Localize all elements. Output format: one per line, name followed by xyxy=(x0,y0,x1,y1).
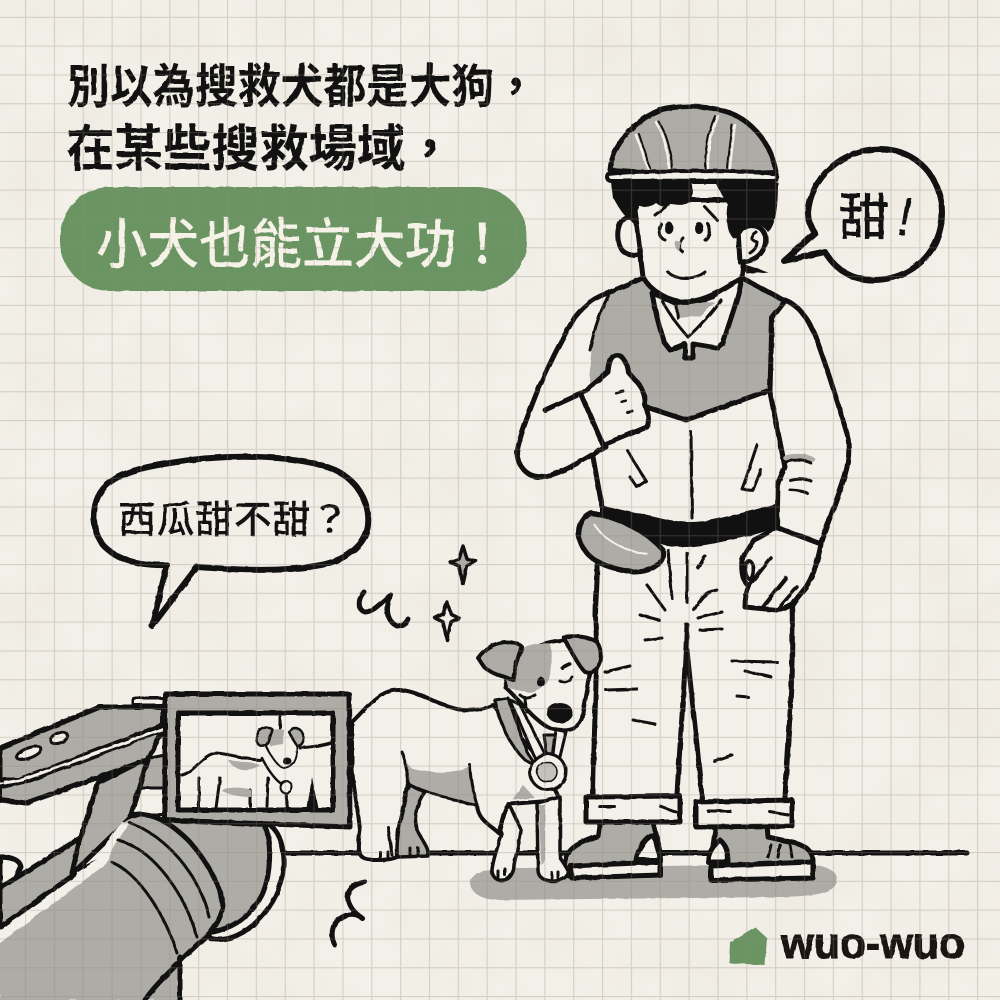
dog: far hind leg xyxy=(390,785,428,857)
man xyxy=(517,107,849,880)
man: pockets and zipper xyxy=(627,432,761,518)
man: right boot xyxy=(708,825,813,880)
man: pants xyxy=(592,540,793,800)
dog: medal xyxy=(530,754,566,790)
man: left arm xyxy=(517,292,612,477)
highlight pill with headline xyxy=(60,187,527,291)
man: waist pouch xyxy=(578,513,664,572)
camera: hinge pieces xyxy=(128,698,165,815)
man: arm sleeve line xyxy=(545,394,580,410)
speech bubble: 甜: ! xyxy=(897,187,912,247)
dog: medal ribbon xyxy=(495,698,566,765)
camera: flip screen xyxy=(165,694,350,827)
man: vest xyxy=(590,278,785,420)
man: right hand xyxy=(742,527,821,610)
man: torso edges xyxy=(593,392,785,525)
camera: lens outline xyxy=(0,814,223,1000)
dog: body xyxy=(352,690,560,860)
dog: near front leg xyxy=(498,785,568,881)
dog xyxy=(352,636,601,881)
logo: wordmark: wuo-wuo xyxy=(780,919,965,968)
man: trouser cuffs xyxy=(586,796,792,827)
man: collar xyxy=(652,278,742,358)
man: face xyxy=(618,200,768,302)
dog: paws on hind leg xyxy=(380,752,477,858)
man: hair xyxy=(611,182,778,238)
camera: side body xyxy=(0,838,103,927)
title line 1: 別以為搜救犬都是大狗， xyxy=(67,60,537,113)
camera xyxy=(0,694,350,1000)
dog: far front leg xyxy=(492,806,521,880)
sparkle: lower xyxy=(435,602,459,640)
dog: belly patch xyxy=(402,752,477,804)
man: thumbs-up hand xyxy=(581,355,648,445)
camera: top handle xyxy=(0,707,163,780)
camera: lens back xyxy=(165,820,270,932)
man: torso xyxy=(590,300,784,510)
speech bubble: 甜: 甜 xyxy=(839,190,889,246)
camera: lens rim xyxy=(180,825,284,940)
speech bubble: 甜 xyxy=(784,149,942,280)
camera: arm xyxy=(68,758,148,878)
man: left boot xyxy=(564,822,660,878)
man: right arm xyxy=(770,300,849,545)
man: vest bottom edge xyxy=(610,278,785,420)
camera: preview window xyxy=(178,713,333,810)
ground shadow xyxy=(470,864,837,900)
camera: small buttons xyxy=(15,730,69,762)
sparkle: upper xyxy=(450,546,476,584)
man: helmet xyxy=(607,107,777,181)
speech bubble: 西瓜甜不甜 xyxy=(94,457,368,626)
man: wrinkles xyxy=(786,456,813,494)
small motion mark xyxy=(332,882,365,945)
ground line xyxy=(285,850,967,856)
camera: white edge highlight xyxy=(0,822,130,943)
logo xyxy=(729,919,965,968)
highlight pill with headline: 小犬也能立大功！ xyxy=(96,215,508,275)
camera: handle highlight xyxy=(4,729,163,783)
squiggle mark xyxy=(359,592,408,626)
logo: house icon xyxy=(729,927,767,965)
camera: lens ribs xyxy=(112,823,209,953)
dog: head xyxy=(478,636,601,730)
speech bubble: 西瓜甜不甜: 西瓜甜不甜？ xyxy=(118,500,350,542)
title line 2: 在某些搜救場域， xyxy=(66,121,454,177)
man: belt xyxy=(600,503,778,547)
camera: lower handle xyxy=(0,730,163,803)
camera: lens body xyxy=(0,816,223,1000)
